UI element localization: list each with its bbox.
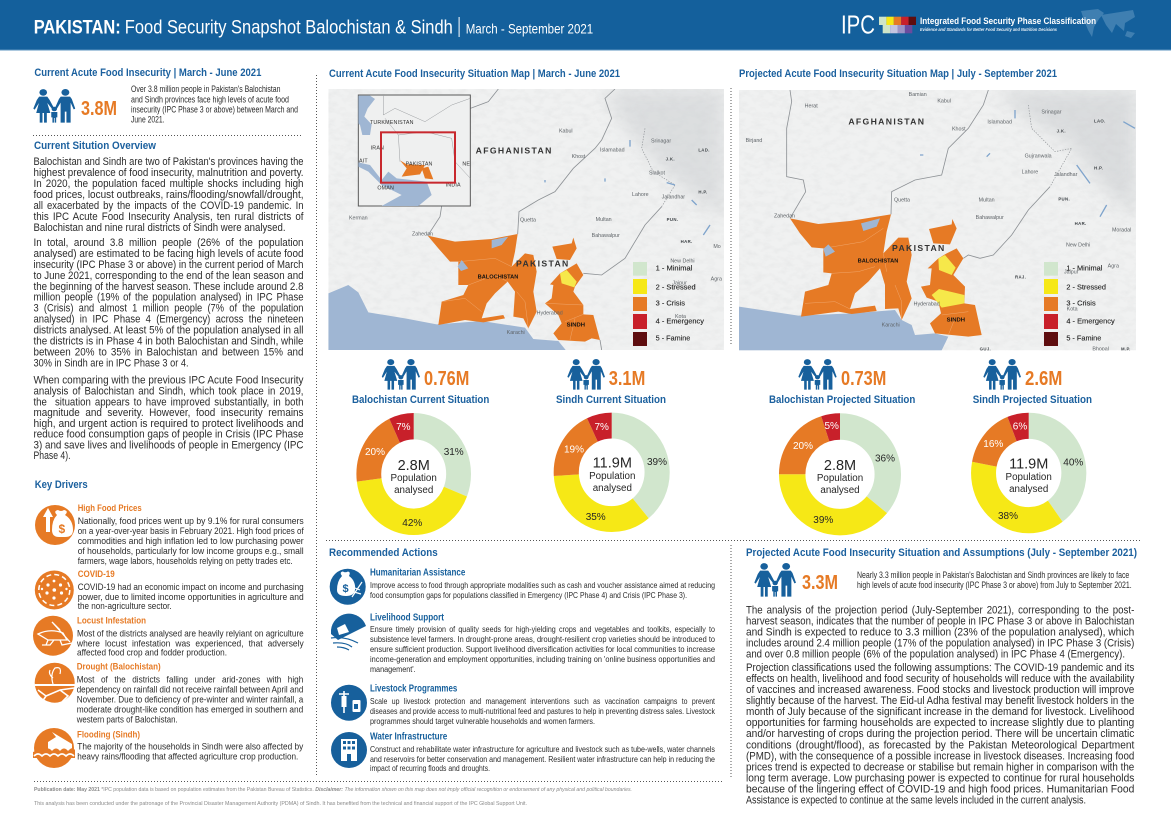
map labels: AFGHANISTAN (848, 117, 925, 127)
action: water infrastructure: impact of recurring floods and droughts. (370, 763, 490, 773)
donut chart: 31% (444, 447, 464, 458)
icon: family (33, 89, 75, 123)
footer notes (34, 787, 632, 807)
action: humanitarian assistance: Humanitarian Assistance (370, 568, 466, 578)
legend (1044, 262, 1115, 346)
driver: high food prices (35, 503, 304, 567)
driver: drought: November. Due to deficiency of pre-winter and winter rainfall, a (77, 694, 304, 706)
projection paragraph 2 (746, 662, 1135, 806)
icon: family (798, 359, 837, 390)
map labels (746, 92, 1131, 352)
action: livestock programmes: Livestock Programmes (370, 684, 458, 694)
inset locator map: NE (462, 162, 470, 168)
driver: high food prices: farmers, wage labors, households relying on petty trades etc. (78, 556, 293, 567)
overview paragraph 1: food prices, locust outbreaks, rains/flooding/snowfall/drought, (34, 189, 304, 201)
donut chart: 39% (647, 457, 667, 468)
header banner (0, 0, 1171, 50)
overview paragraph 3 (34, 374, 304, 462)
map labels: Islamabad (987, 119, 1012, 125)
driver: covid-19: power, due to limited income opportunities in agriculture and (78, 592, 304, 603)
icon: family (567, 359, 605, 390)
donut chart: 36% (875, 454, 895, 464)
map labels: Gujranwala (1025, 153, 1052, 159)
driver: high food prices: Nationally, food prices went up by 9.1% for rural consumers (78, 516, 304, 527)
Sindh districts (552, 238, 577, 260)
overview paragraph 3: 3) and save lives and livelihoods of people in Emergency (IPC (34, 440, 304, 452)
donut chart: 2.8M (398, 458, 430, 474)
stat 3.3M: 3.3M (802, 572, 838, 594)
map labels: Zahedan (774, 214, 795, 220)
driver: flooding: Flooding (Sindh) (77, 730, 140, 740)
donut chart: 20% (365, 447, 385, 458)
map labels: Jaipur (1064, 270, 1079, 276)
map labels: Quetta (520, 217, 536, 223)
summary text (857, 570, 1132, 590)
donut chart: analysed (820, 485, 860, 496)
driver: covid-19: the non-agriculture sector. (78, 601, 172, 612)
map labels: Karachi (507, 330, 525, 336)
overview paragraph 2: to June 2021, corresponding to the end of the lean season and (34, 270, 304, 282)
map labels: Sialkot (649, 171, 666, 177)
map labels: Bahawalpur (976, 215, 1004, 221)
overview paragraph 1: Balochistan and Sindh are two of Pakistan's provinces having the (34, 156, 304, 168)
inset locator map: TURKMENISTAN (370, 120, 414, 126)
donut chart (564, 422, 667, 523)
driver: covid-19: COVID-19 (78, 569, 115, 580)
legend: 5 - Famine (656, 334, 690, 343)
icon: money bag and grain (330, 569, 366, 605)
icon: cracked soil and seedling (35, 663, 75, 703)
icon: flooded house (33, 728, 75, 768)
overview paragraph 3: analysis of Balochistan and Sindh, which took place in 2019, (34, 386, 304, 398)
legend: 5 - Famine (1066, 334, 1101, 343)
map labels: HAR. (681, 239, 693, 244)
icon: virus (35, 570, 74, 610)
donut chart: 19% (564, 444, 584, 456)
icon: family (983, 359, 1021, 390)
driver: locust infestation: affected food crop and fodder production. (77, 648, 227, 658)
heading: Current Acute Food Insecurity | March - June 2021 (34, 67, 261, 79)
Sindh districts (929, 219, 957, 244)
IPC logo (841, 11, 1096, 39)
map labels: Lahore (1022, 169, 1038, 175)
panel: key drivers (33, 479, 304, 768)
title: Food Security Snapshot Balochistan & Sindh (125, 16, 453, 38)
inset locator map: IRAN (371, 145, 384, 151)
projection paragraph 2: conditions (drought/flood), as forecasted by the Pakistan Meteorological Department (746, 740, 1134, 752)
donut chart: 6% (1013, 422, 1027, 432)
footer notes: Publication date: May 2021 *IPC population data is based on population estimates from the Pakistan Bureau of Statistics. Disclaimer: The information shown on this map does not imply official recognition or endorsement of any physical and political boundaries. (34, 787, 632, 793)
map labels: H.P. (698, 190, 708, 195)
donut chart: analysed (394, 485, 433, 496)
map labels: New Delhi (1066, 242, 1090, 248)
map labels: Quetta (894, 198, 910, 204)
driver: flooding: heavy rains/flooding that affected agriculture crop production. (77, 752, 298, 762)
driver: locust infestation: Locust Infestation (77, 616, 146, 626)
map labels: Multan (596, 217, 612, 223)
donut chart (365, 422, 464, 529)
sea (739, 307, 948, 350)
heading: Key Drivers (35, 479, 88, 491)
donut chart: 11.9M (593, 456, 632, 472)
map labels: Srinagar (651, 138, 671, 144)
legend: 4 - Emergency (1066, 317, 1115, 326)
overview paragraph 2 (34, 237, 304, 370)
action: water infrastructure: Construct and rehabilitate water infrastructure for agriculture and livestock such as tube-wells, water channels (370, 744, 715, 754)
donut chart: 11.9M (1009, 456, 1048, 472)
driver: drought (35, 662, 304, 726)
map labels: SINDH (567, 323, 585, 329)
map labels: New Delhi (670, 259, 695, 265)
stat: 3.1M (609, 368, 645, 390)
map labels: Jaipur (672, 280, 687, 286)
overview paragraph 2: 30% in Sindh are in IPC Phase 3 or 4. (34, 358, 188, 370)
inset locator map: INDIA (446, 183, 461, 189)
driver: high food prices: High Food Prices (78, 503, 142, 514)
driver: locust infestation: where locust infestation was experienced, that adversely (76, 638, 304, 650)
map labels: Agra (1108, 264, 1119, 270)
icon: money bag and arrow: $ (58, 522, 66, 536)
heading: Balochistan Projected Situation (769, 394, 916, 406)
footer notes: This analysis has been conducted under the patronage of the Provincial Disaster Management Authority (PDMA) of Sindh. It has benefited from the technical and financial support of the IPC Global Support Unit. (34, 801, 527, 807)
action: water infrastructure (331, 732, 715, 773)
projection paragraph 2: because of the lingering effect of COVID-19 and high food prices. Humanitarian Food (746, 784, 1134, 796)
donut chart: 42% (402, 518, 422, 529)
overview paragraph 3: the situation appears to have improved substantially, in both (34, 396, 304, 408)
legend: 3 - Crisis (656, 298, 685, 307)
map labels: Agra (711, 276, 722, 282)
map labels: Hyderabad (914, 302, 940, 308)
map labels: AFGHANISTAN (476, 145, 553, 155)
map labels: Bahawalpur (592, 233, 620, 239)
action: livelihood support: income-generation and employment opportunities, including training on 'online business opportunities and (370, 654, 715, 664)
map labels: Kerman (349, 216, 368, 222)
projection paragraph 2: opportunities for farming households are expected to increase slightly due to planting (746, 717, 1134, 729)
donut chart: 5% (824, 421, 839, 432)
summary text: insecurity (IPC Phase 3 or above) between March and (131, 104, 298, 114)
map labels: Bhopal (1092, 346, 1109, 352)
stat 3.8M: 3.8M (81, 98, 117, 120)
inset locator map: AIT (359, 158, 368, 164)
heading: Sindh Current Situation (556, 394, 666, 406)
Balochistan districts (790, 214, 912, 320)
map: current situation (328, 89, 724, 350)
overview paragraph 3: Phase 4). (34, 450, 70, 462)
overview paragraph 2: In total, around 3.8 million people (26% of the population (34, 237, 304, 249)
driver: covid-19: COVID-19 had an economic impact on income and purchasing (78, 582, 304, 593)
driver: high food prices: on a year-over-year basis in February 2021. High food prices of (78, 526, 304, 537)
legend: 4 - Emergency (656, 317, 704, 326)
heading: Recommended Actions (329, 547, 438, 559)
icon: family (382, 359, 420, 390)
action: livelihood support: management'. (370, 664, 416, 674)
donut chart: Population (1006, 472, 1052, 483)
map labels: Birjand (746, 138, 762, 144)
action: humanitarian assistance (330, 568, 715, 605)
donut chart: 16% (983, 439, 1003, 450)
donut chart: Population (817, 473, 863, 484)
map labels: Islamabad (600, 148, 625, 154)
map labels: Bamian (909, 92, 927, 98)
IPC logo: IPC (841, 11, 875, 39)
overview paragraph 1: Balochistan and nine rural districts of Sindh were analysed. (34, 222, 286, 234)
donut chart: 7% (396, 422, 411, 433)
summary text: Over 3.8 million people in Pakistan's Balochistan (131, 84, 281, 94)
map labels: H.P. (1094, 166, 1103, 171)
icon: building (331, 732, 367, 768)
action: livelihood support: Livelihood Support (370, 612, 445, 624)
map labels: Khost (572, 154, 586, 160)
donut chart (983, 422, 1083, 522)
action: water infrastructure: and reservoirs for better conservation and management. Resilient water infrastructure can help in reducing the (370, 754, 715, 764)
map labels: Srinagar (1041, 110, 1062, 116)
overview paragraph 2: million people (19% of the population analysed) in IPC Phase (34, 292, 304, 304)
legend: 2 - Stressed (656, 283, 696, 292)
overview paragraph 2: 3 (Crisis) and almost 1 million people (7% of the population (34, 302, 304, 314)
overview paragraph 2: between 20% to 35% in Balochistan and between 15% and (34, 346, 304, 358)
panel: recommended actions (329, 547, 716, 773)
action: humanitarian assistance: food consumption gaps for populations classified in Emergency (IPC Phase 4) and Crisis (IPC Phase 3). (370, 590, 687, 600)
map labels: SINDH (947, 318, 965, 324)
title: March - September 2021 (466, 22, 593, 36)
overview paragraph 1: all exacerbated by the impacts of the COVID-19 pandemic. In (34, 200, 304, 212)
map labels: RAJ. (1015, 275, 1026, 280)
legend: 2 - Stressed (1066, 283, 1106, 292)
driver: locust infestation (33, 616, 304, 658)
overview paragraph 2: districts analysed. At least 5% of the population analysed in all (34, 324, 304, 336)
map labels: LAO. (1094, 118, 1106, 123)
action: livelihood support: subsistence level farmers. In drought-prone areas, drought-resilient crop varieties should be introduced to (370, 634, 715, 644)
summary text (131, 84, 298, 124)
panel: Balochistan current situation (352, 359, 490, 529)
panel: current situation overview (34, 140, 304, 462)
action: livestock programmes (331, 684, 716, 726)
inset locator map: PAKISTAN (406, 162, 433, 168)
stat: 0.76M (424, 368, 469, 390)
projection paragraph 2: Assistance is expected to continue at the same levels included in the current analysis. (746, 794, 1086, 806)
driver: high food prices: commodities and high inflation led to low purchasing power (78, 536, 304, 547)
map labels: HAR. (1075, 221, 1087, 226)
map labels: J.K. (1057, 129, 1066, 134)
map labels: Zahedan (412, 232, 433, 238)
heading: Balochistan Current Situation (352, 394, 490, 406)
map: projected situation (739, 90, 1136, 352)
overview paragraph 1: highest prevalence of food insecurity, malnutrition and poverty. (34, 167, 304, 179)
icon: money bag and grain: $ (342, 583, 349, 595)
projection paragraph 2: and/or harvesting of crops during the projection period. There will be uncertain climatic (746, 728, 1135, 740)
donut chart: 20% (793, 441, 813, 452)
donut chart: 38% (998, 511, 1018, 522)
overview paragraph 2: analysed) in IPC Phase 4 (Emergency) across the nineteen (34, 314, 304, 326)
donut chart: 7% (594, 422, 609, 433)
overview paragraph 1: this IPC Acute Food Insecurity Analysis, ten rural districts of (34, 211, 304, 223)
driver: drought: Drought (Balochistan) (77, 662, 161, 672)
title (34, 16, 593, 38)
summary text: June 2021. (131, 114, 165, 124)
action: water infrastructure: Water Infrastructure (370, 732, 448, 742)
donut chart: Population (391, 473, 437, 484)
map labels: PAKISTAN (516, 259, 570, 269)
map labels: Karachi (882, 322, 900, 328)
action: livestock programmes: Scale up livestock protection and management interventions such as vaccination campaigns to prevent (370, 696, 715, 706)
projection paragraph 1: and over 0.8 million people (6% of the population analysed) in IPC Phase 4 (Emergency). (746, 648, 1125, 660)
map labels: BALOCHISTAN (478, 275, 518, 281)
map labels: Jalandhar (662, 194, 685, 200)
action: livestock programmes: programmes should target vulnerable households and women farmers. (370, 716, 595, 726)
map labels: Moradal (1112, 227, 1131, 233)
icon: field and tools (331, 614, 366, 650)
map labels: M.P. (1121, 347, 1131, 352)
projection paragraph 2: of vaccines and increased awareness. Food stocks and livestock production will improve (746, 684, 1134, 696)
stat: 0.73M (841, 368, 886, 390)
map labels: Kabul (559, 128, 573, 134)
map labels: Hyderabad (537, 310, 563, 316)
map labels: Jalandhar (1054, 172, 1078, 178)
action: livestock programmes: diseases and provide access to multi-nutritional feed and pastures to help in preventing distress sales. Livestock (370, 706, 716, 716)
map labels: PAKISTAN (892, 243, 946, 253)
donut chart: analysed (593, 483, 632, 494)
overview paragraph 2: the beginning of the harvest season. These include around 2.8 (34, 281, 304, 293)
panel: projected situation and assumptions (746, 547, 1137, 806)
map labels: Kota (675, 314, 686, 320)
map labels: J.K. (666, 156, 675, 161)
heading: Sindh Projected Situation (973, 394, 1092, 406)
overview paragraph 1: In 2020, the population faced multiple shocks including high (34, 178, 304, 190)
donut chart (792, 421, 895, 526)
projection paragraph 1: and Sindh is expected to reduce to 3.3 million (23% of the population analysed), which (746, 626, 1134, 638)
icon: family (754, 563, 796, 597)
overview paragraph 3: When comparing with the previous IPC Acute Food Insecurity (34, 374, 304, 386)
map labels: Herat (805, 104, 818, 110)
map labels: Kabul (937, 99, 951, 105)
overview paragraph 2: the districts is in Phase 4 in both Balochistan and Sindh, while (34, 336, 304, 348)
overview paragraph 3: magnitude and severity. However, food insecurity remains (34, 407, 304, 419)
driver: drought: Most of the districts falling under arid-zones with high (77, 674, 303, 686)
heading: Current Sitution Overview (34, 140, 156, 152)
overview paragraph 2: insecurity (IPC Phase 3 or above) in the current period of March (34, 259, 304, 271)
map labels (349, 128, 722, 336)
donut chart: analysed (1009, 484, 1048, 495)
map labels: Khost (952, 127, 966, 133)
overview paragraph 1 (34, 156, 304, 234)
map labels: LAD. (698, 147, 710, 152)
overview paragraph 3: reduce food consumption gaps of people in Crisis (IPC Phase (34, 428, 304, 440)
driver: flooding (33, 728, 303, 768)
stat: 2.6M (1025, 368, 1062, 390)
icon: syringe and vial (331, 685, 367, 721)
donut chart: 35% (586, 512, 606, 523)
projection paragraph 2: month of July because of the significant increase in the demand for livestock. Livelihood (746, 706, 1134, 718)
heading: current map: Current Acute Food Insecurity Situation Map | March - June 2021 (329, 68, 620, 80)
Balochistan districts (428, 234, 537, 328)
inset locator map (358, 95, 470, 206)
action: livelihood support (331, 612, 715, 674)
projection paragraph 2: long term average. Low purchasing power is expected to continue for rural households (746, 772, 1135, 784)
action: livelihood support: ensure sufficient production. Support livelihood diversification activities for local communities to increase (370, 644, 715, 654)
legend (633, 262, 704, 346)
map labels: BALOCHISTAN (858, 258, 898, 264)
action: humanitarian assistance: Improve access to food through appropriate modalities such as cash and voucher assistance aimed at reducing (370, 580, 715, 590)
heading: projected map: Projected Acute Food Insecurity Situation Map | July - September 2021 (739, 68, 1057, 80)
inset locator map: OMAN (377, 186, 394, 192)
driver: locust infestation: Most of the districts analysed are heavily relyiant on agriculture (77, 628, 304, 640)
map labels: GUJ. (980, 347, 991, 352)
legend: 1 - Minimal (656, 264, 693, 273)
map labels: PUN. (1058, 196, 1070, 201)
donut chart: 40% (1063, 458, 1083, 468)
overview paragraph 2: analysed) are estimated to be facing high levels of acute food (34, 248, 304, 260)
projection paragraph 1 (746, 604, 1135, 660)
map labels: Kota (1067, 306, 1078, 312)
title: PAKISTAN: (34, 16, 121, 38)
driver: covid-19 (35, 569, 304, 612)
icon: locust (33, 616, 73, 656)
donut chart: 39% (813, 515, 833, 526)
donut chart: 2.8M (824, 458, 856, 474)
map labels: Mo (713, 244, 721, 250)
borders (428, 89, 662, 350)
driver: drought: dependency on rainfall did not receive rainfall between April and (77, 684, 303, 696)
driver: high food prices: of households, particularly for low income groups e.g., small (78, 546, 304, 557)
driver: flooding: The majority of the households in Sindh were also affected by (77, 742, 303, 752)
IPC logo: Evidence and Standards for Better Food Security and Nutrition Decisions (920, 27, 1057, 32)
panel: Balochistan projected situation (769, 359, 916, 526)
summary text: and Sindh provinces face high levels of acute food (131, 94, 289, 104)
projection paragraph 2: prices trend is expected to decrease or stabilise but remain higher in comparison with the (746, 762, 1134, 774)
borders (787, 90, 1050, 258)
panel: Sindh projected situation (973, 359, 1092, 522)
sea (328, 285, 566, 350)
IPC logo: Integrated Food Security Phase Classification (920, 16, 1096, 27)
donut chart: Population (589, 471, 635, 482)
world map watermark (1081, 9, 1135, 38)
map labels: PUN. (667, 217, 678, 222)
driver: drought: moderate drought-like condition has emerged in southern and (77, 704, 303, 716)
action: livelihood support: Ensure timely provision of quality seeds for high-yielding crops and vegetables and toolkits, especially to (370, 624, 715, 634)
map labels: Lahore (632, 192, 649, 198)
panel: Sindh current situation (556, 359, 667, 523)
icon: money bag and arrow (35, 505, 75, 545)
driver: drought: western parts of Balochistan. (76, 714, 178, 726)
map labels: Multan (979, 197, 995, 203)
legend: 1 - Minimal (1066, 264, 1103, 273)
overview paragraph 3: high, and urgent action is required to protect livelihoods and (34, 418, 304, 430)
panel: current acute food insecurity (33, 67, 298, 124)
legend: 3 - Crisis (1066, 298, 1096, 307)
